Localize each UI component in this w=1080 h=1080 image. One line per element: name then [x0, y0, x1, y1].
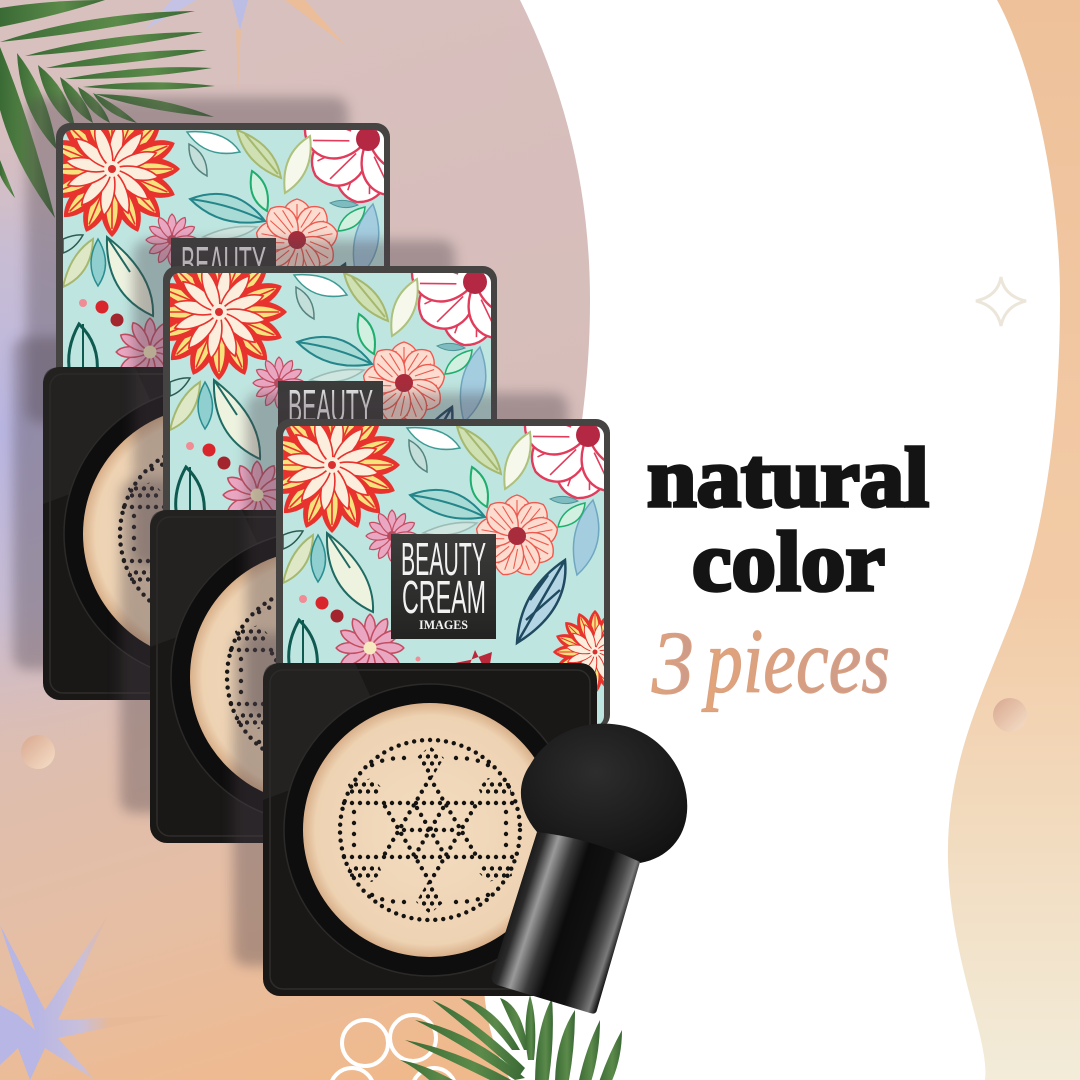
- lid: [56, 123, 390, 433]
- subheading: 3 pieces: pieces: [701, 610, 890, 712]
- subheading: 3 pieces: [651, 610, 890, 713]
- white wave panel: [483, 0, 1060, 1080]
- lid: [276, 419, 610, 729]
- label: [171, 237, 276, 343]
- heading: natural color: natural: [647, 431, 929, 525]
- product compact 3 with soft shadow: [233, 393, 655, 996]
- label: [278, 380, 383, 486]
- label: beauty cream: IMAGES: [419, 617, 468, 632]
- decorative ball right: [993, 698, 1027, 732]
- label: beauty cream: CREAM: [402, 571, 486, 623]
- decorative star bottom left: [0, 915, 170, 1080]
- decorative rings: [330, 1015, 456, 1080]
- palm leaf top left: [0, 0, 215, 218]
- subheading: 3 pieces: 3: [651, 614, 694, 713]
- base: [43, 367, 377, 700]
- label: beauty cream: [391, 533, 496, 639]
- label: beauty cream: BEAUTY: [401, 533, 486, 585]
- heading: natural color: [647, 431, 929, 609]
- background: right peach panel: [900, 0, 1080, 1080]
- heading: natural color: color: [692, 515, 885, 609]
- product compact 1: [13, 97, 435, 700]
- icon: sparkle: [976, 277, 1026, 326]
- palm leaf bottom: [400, 995, 622, 1080]
- lid: [163, 266, 497, 576]
- decorative top rays: [145, 0, 345, 92]
- label: BEAUTY: [288, 380, 373, 432]
- base: [150, 510, 484, 843]
- decorative ball left: [21, 735, 55, 769]
- background: lavender glow: [0, 100, 340, 780]
- base with powder: [263, 663, 597, 996]
- mushroom puff: [492, 724, 687, 1014]
- label: BEAUTY: [181, 237, 266, 289]
- background: left gradient panel: [0, 0, 700, 1080]
- product compact 2: [120, 240, 542, 843]
